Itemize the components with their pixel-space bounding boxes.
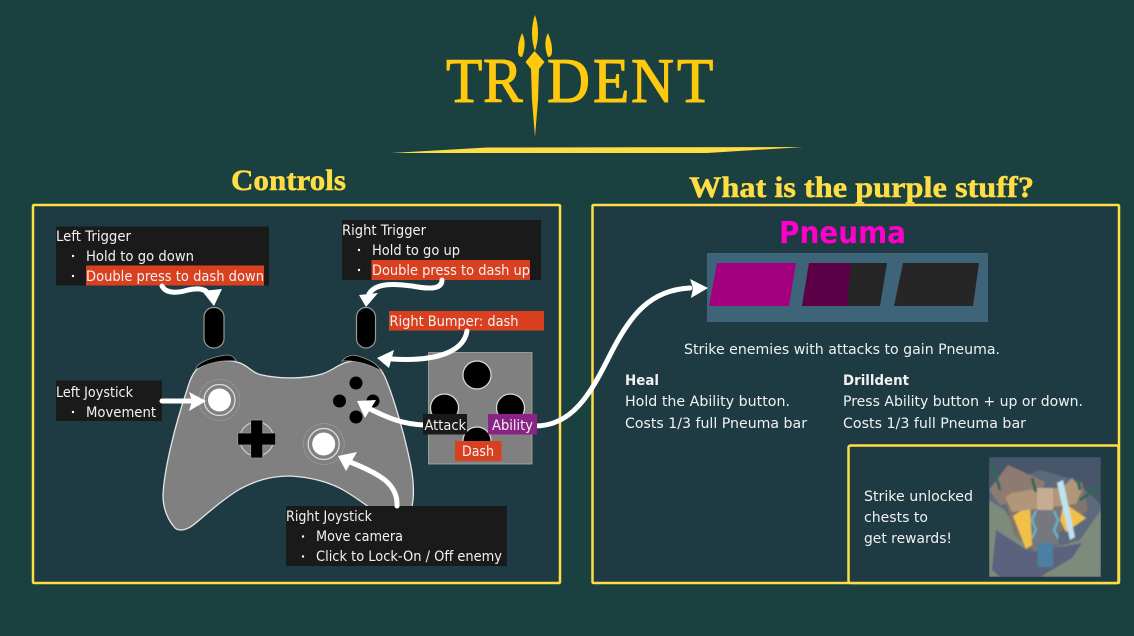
pneuma description: Strike enemies with attacks to gain Pneuma. bbox=[684, 342, 1000, 358]
text block: heal bbox=[625, 373, 807, 432]
callout: left joystick: Movement bbox=[86, 405, 156, 421]
callout: left joystick bbox=[56, 380, 162, 421]
d-pad bbox=[238, 420, 276, 458]
left bumper bbox=[196, 355, 236, 369]
chest text: chests to bbox=[864, 510, 928, 526]
right trigger capsule bbox=[356, 308, 376, 348]
callout: right trigger bbox=[342, 220, 541, 280]
chest text bbox=[864, 489, 973, 547]
panel: controls bbox=[33, 205, 560, 583]
icon: trident spear bbox=[518, 15, 552, 137]
callout: right joystick: Right Joystick bbox=[286, 509, 373, 525]
label: attack: Attack bbox=[424, 418, 467, 434]
chest text: get rewards! bbox=[864, 531, 952, 547]
arrow: right bumper bbox=[377, 331, 467, 368]
face buttons bbox=[333, 376, 380, 424]
panel: purple stuff bbox=[592, 205, 1119, 583]
callout: right trigger: Hold to go up bbox=[372, 243, 460, 259]
text block: drilldent: Press Ability button + up or down. bbox=[843, 394, 1083, 410]
logo underline bbox=[391, 147, 803, 153]
heading: Controls: Controls bbox=[231, 164, 346, 197]
arrow: left trigger bbox=[162, 286, 222, 306]
arrow: right trigger bbox=[359, 280, 442, 307]
callout: right joystick bbox=[286, 506, 507, 566]
empty segment bbox=[894, 263, 979, 306]
callout: left trigger: Left Trigger bbox=[56, 229, 131, 245]
text block: drilldent: Costs 1/3 full Pneuma bar bbox=[843, 416, 1026, 432]
heading: Pneuma: Pneuma bbox=[779, 216, 906, 251]
arrow: attack bbox=[357, 400, 424, 425]
text block: heal: Costs 1/3 full Pneuma bar bbox=[625, 416, 807, 432]
text block: drilldent: Drilldent bbox=[843, 373, 909, 389]
left joystick bbox=[199, 380, 240, 420]
callout: left trigger: Double press to dash down bbox=[86, 269, 264, 285]
controller body bbox=[163, 361, 413, 530]
label: dash bbox=[455, 441, 502, 461]
label: ability bbox=[488, 414, 537, 434]
callout: right bumper: Right Bumper: dash bbox=[390, 314, 518, 330]
logo: Trident bbox=[446, 15, 713, 137]
label: ability: Ability bbox=[492, 418, 533, 434]
text block: heal: Heal bbox=[625, 373, 659, 389]
heading: What is the purple stuff: What is the purple stuff? bbox=[689, 171, 1034, 204]
button map panel bbox=[428, 352, 532, 464]
left trigger capsule bbox=[204, 308, 224, 348]
right joystick bbox=[303, 424, 344, 464]
chest picture bbox=[989, 457, 1101, 577]
pneuma bar bbox=[707, 253, 988, 322]
callout: right trigger: Right Trigger bbox=[342, 223, 426, 239]
controller bbox=[163, 355, 413, 530]
callout: left joystick: Left Joystick bbox=[56, 385, 134, 401]
callout: right joystick: Click to Lock-On / Off enemy bbox=[316, 549, 502, 565]
callout: right joystick: Move camera bbox=[316, 529, 403, 545]
callout: left trigger bbox=[56, 226, 269, 286]
callout: right trigger: Double press to dash up bbox=[372, 263, 530, 279]
chest text: Strike unlocked bbox=[864, 489, 973, 505]
text block: drilldent bbox=[843, 373, 1083, 432]
panel: chest bbox=[848, 446, 1118, 583]
logo wordmark: TRIDENT bbox=[446, 46, 713, 116]
text block: heal: Hold the Ability button. bbox=[625, 394, 790, 410]
label: dash: Dash bbox=[462, 444, 494, 460]
callout: left trigger: Hold to go down bbox=[86, 249, 194, 265]
arrow: ability to pneuma bar bbox=[535, 279, 708, 426]
full segment bbox=[709, 263, 796, 306]
arrow: right joystick bbox=[338, 452, 397, 506]
partial segment bbox=[802, 263, 887, 306]
right bumper bbox=[342, 355, 381, 371]
arrow: left joystick bbox=[162, 392, 206, 411]
